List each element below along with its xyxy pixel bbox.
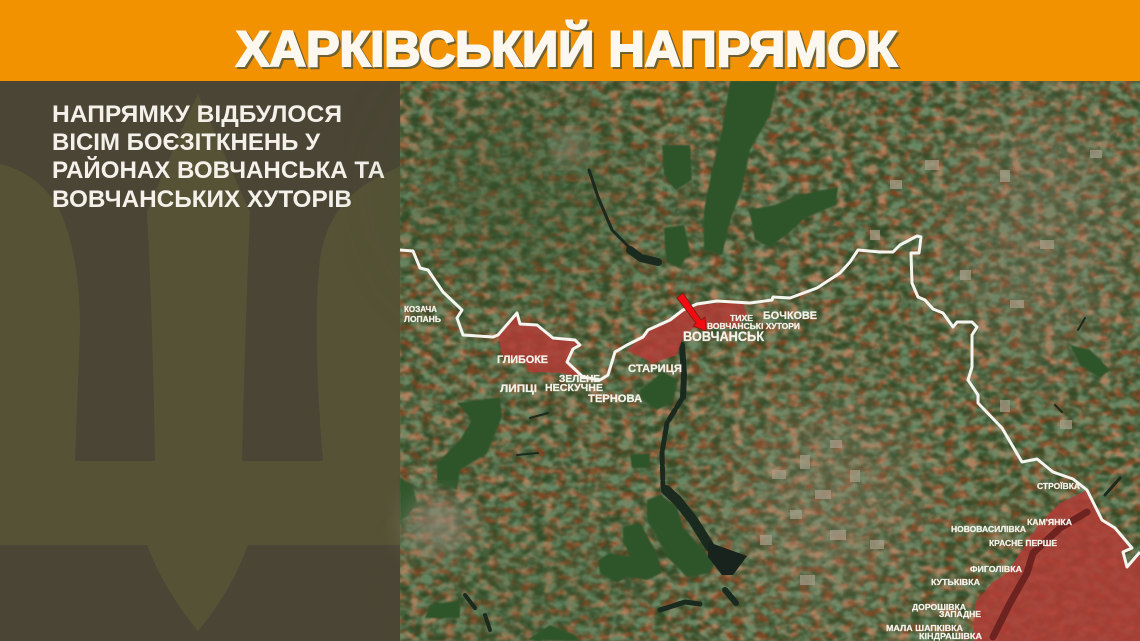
place labels: ЛИПЦІ <box>500 383 537 395</box>
place labels: НОВОВАСИЛІВКА <box>951 524 1026 534</box>
title: ХАРКІВСЬКИЙ НАПРЯМОК <box>238 22 899 79</box>
place labels: ФИГОЛІВКА <box>970 564 1022 574</box>
place labels: БОЧКОВЕ <box>763 310 817 322</box>
direction arrow <box>677 293 706 331</box>
place labels: СТРОЇВКА <box>1037 481 1080 491</box>
place labels: ВОВЧАНСЬК <box>683 328 764 344</box>
towns <box>406 134 584 553</box>
place labels: ТИХЕ <box>730 314 754 323</box>
place labels: ЗЕЛЕНЕ <box>559 374 600 385</box>
description text <box>52 101 385 213</box>
place labels: КОЗАЧА <box>404 305 437 314</box>
place labels <box>404 305 1080 641</box>
place labels: МАЛА ШАПКІВКА <box>886 623 963 633</box>
place labels: НЕСКУЧНЕ <box>545 383 603 394</box>
place labels: ТЕРНОВА <box>588 393 642 405</box>
place labels: КІНДРАШІВКА <box>919 631 982 641</box>
description text: ВІСІМ БОЄЗІТКНЕНЬ У <box>52 129 321 156</box>
place labels: ЛОПАНЬ <box>404 315 441 324</box>
light field patches <box>760 150 1102 585</box>
forests <box>400 81 1110 641</box>
place labels: ЗАПАДНЕ <box>939 609 981 619</box>
place labels: КУТЬКІВКА <box>931 577 980 587</box>
satellite map <box>400 81 1140 641</box>
occupied zone: Vovchansk <box>627 303 747 363</box>
tonal regions <box>410 90 1130 640</box>
header bar <box>0 0 1140 81</box>
occupied zone: Hlyboke <box>498 313 583 377</box>
place labels: ВОВЧАНСЬКІ ХУТОРИ <box>707 321 800 331</box>
description text: РАЙОНАХ ВОВЧАНСЬКА ТА <box>52 156 385 184</box>
place labels: СТАРИЦЯ <box>628 363 682 375</box>
place labels: КРАСНЕ ПЕРШЕ <box>989 538 1057 548</box>
left panel <box>0 80 400 641</box>
description text: НАПРЯМКУ ВІДБУЛОСЯ <box>52 101 342 128</box>
place labels: ДОРОШІВКА <box>912 602 966 612</box>
title: ХАРКІВСЬКИЙ НАПРЯМОК <box>236 20 897 77</box>
rivers and reservoirs <box>465 170 1120 630</box>
place labels: КАМ'ЯНКА <box>1027 517 1072 527</box>
border line <box>400 236 1140 567</box>
place labels: ГЛИБОКЕ <box>497 354 548 366</box>
occupied zone: southeast <box>973 490 1140 641</box>
description text: ВОВЧАНСЬКИХ ХУТОРІВ <box>52 186 352 213</box>
trident watermark <box>0 94 400 631</box>
